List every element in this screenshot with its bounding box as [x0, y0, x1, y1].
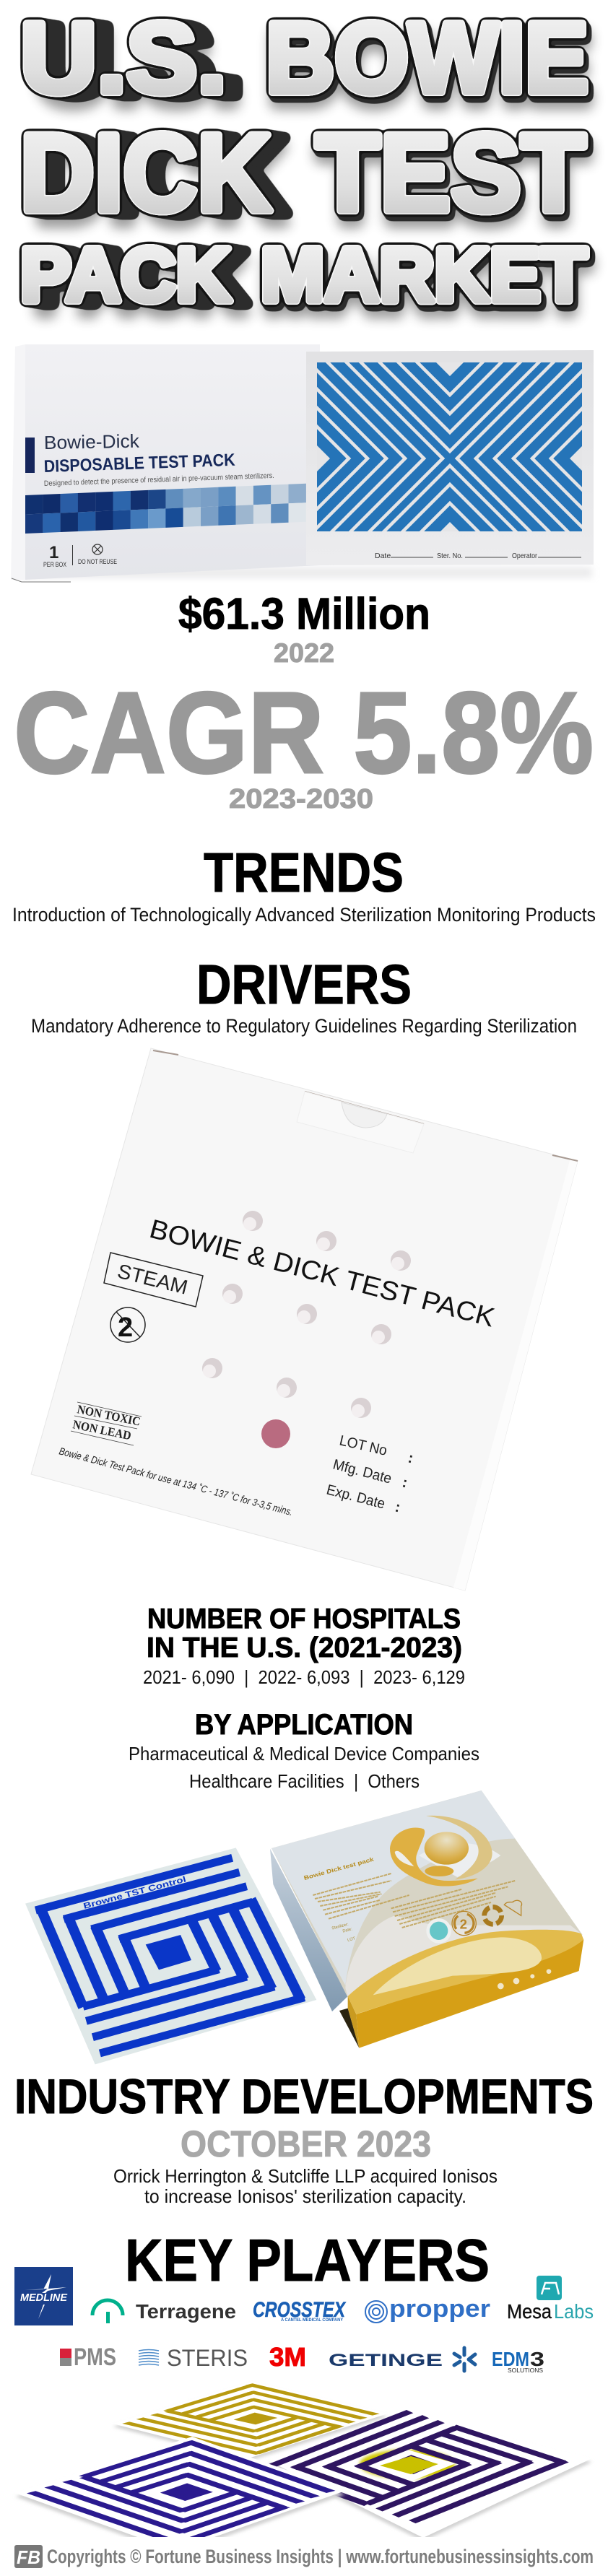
title line: PACK MARKET: MARKET	[261, 232, 587, 318]
title line: DICK TEST: DICK	[20, 111, 272, 235]
non toxic label	[71, 1402, 142, 1445]
product photo: disposable test pack	[11, 344, 594, 582]
lot fields: Exp. Date	[325, 1482, 387, 1513]
development text	[113, 2165, 498, 2207]
logo: Terragene: Terragene	[136, 2300, 236, 2323]
gold sheet	[114, 2383, 386, 2460]
lot fields: :	[394, 1500, 402, 1515]
sterilizer fields	[331, 1923, 356, 1943]
development text: to increase Ionisos' sterilization capacity.	[144, 2185, 466, 2207]
lot fields: :	[407, 1450, 415, 1466]
box side	[11, 344, 25, 580]
logo: Getinge: GETINGE	[329, 2351, 443, 2370]
market value year: 2022	[274, 638, 334, 668]
hospital numbers: 2021- 6,090 | 2022- 6,093 | 2023- 6,129	[143, 1666, 465, 1688]
title line: PACK MARKET: PACK	[20, 232, 231, 318]
gold wrap front	[356, 1940, 583, 2048]
swirl logo	[390, 1816, 492, 1887]
logo: Medline: MEDLINE	[20, 2292, 68, 2304]
product photo: gold wrapped pack	[270, 1790, 583, 2048]
gold wrap curve	[348, 1930, 583, 2014]
non toxic label: NON TOXIC	[76, 1402, 142, 1429]
product photo: blue test sheet: Browne TST Control	[82, 1875, 187, 1911]
market value: $61.3 Million	[178, 589, 430, 638]
indicator dot	[261, 1419, 290, 1448]
development date: OCTOBER 2023	[181, 2123, 431, 2164]
checker band	[25, 484, 306, 534]
blue sheet	[16, 2437, 347, 2537]
steam box: STEAM	[116, 1260, 190, 1299]
single-use icon	[110, 1307, 145, 1343]
title line: PACK MARKET	[20, 232, 587, 318]
heading: trends: TRENDS	[204, 842, 404, 904]
heading: by application: BY APPLICATION	[195, 1709, 413, 1741]
logo: Getinge	[329, 2348, 475, 2371]
product photo: disposable test pack: PER BOX	[43, 561, 66, 568]
logo: Mesa Labs: Labs	[554, 2300, 594, 2323]
pack title: BOWIE & DICK TEST PACK	[147, 1214, 498, 1333]
title line: U.S. BOWIE	[20, 2, 589, 114]
do-not-reuse icon	[92, 544, 103, 554]
title line: DICK TEST	[20, 111, 586, 235]
blue chevron pattern	[317, 362, 582, 531]
logo: Crosstex: CROSSTEX	[253, 2298, 347, 2322]
CAGR period: 2023-2030	[229, 784, 373, 814]
heading: drivers: DRIVERS	[196, 954, 412, 1016]
heading: number of hospitals: IN THE U.S. (2021-2023)	[147, 1632, 462, 1663]
pack label: Bowie Dick test pack	[303, 1856, 375, 1881]
flap slits	[153, 1050, 578, 1161]
logo: Steris: STERIS	[167, 2345, 248, 2371]
application list	[129, 1743, 479, 1792]
flap tab	[297, 1092, 424, 1153]
heading: key players: KEY PLAYERS	[125, 2227, 490, 2294]
per box count: 1	[49, 543, 58, 562]
box front	[25, 344, 320, 580]
white icons on gold	[498, 1969, 551, 1989]
logo: Terragene	[92, 2300, 236, 2323]
box description: Designed to detect the presence of residual air in pre-vacuum steam sterilizers.	[44, 471, 274, 488]
product photo: steam test pack	[31, 1048, 578, 1591]
box subtitle: DISPOSABLE TEST PACK	[43, 451, 236, 477]
product photo: disposable test pack: DO NOT REUSE	[78, 558, 117, 565]
logo: Mesa Labs	[507, 2276, 594, 2323]
box title: Bowie-Dick	[44, 430, 140, 453]
logo: PMS	[60, 2344, 116, 2371]
insert form line: Date	[375, 552, 391, 560]
purple sheet	[269, 2410, 591, 2537]
logo: Crosstex: A CANTEL MEDICAL COMPANY	[281, 2318, 344, 2323]
footer	[14, 2545, 594, 2568]
logo: Propper: propper	[389, 2295, 490, 2323]
steam box	[104, 1253, 203, 1307]
pack top face	[272, 1790, 583, 1998]
box bottom edge	[12, 578, 71, 582]
product photo: blue test sheet	[25, 1848, 316, 2064]
sterilizer fields: Date:	[342, 1927, 353, 1934]
lot fields: :	[401, 1475, 409, 1491]
teal dot	[426, 1918, 451, 1944]
development text: Orrick Herrington & Sutcliffe LLP acquired Ionisos	[113, 2165, 498, 2187]
label fine print	[313, 1874, 515, 1928]
logo: EDM3: 3	[530, 2348, 544, 2370]
box divider	[72, 545, 73, 565]
title	[20, 2, 589, 318]
insert card	[306, 350, 594, 565]
logo: PMS: PMS	[74, 2344, 116, 2371]
non toxic label: NON LEAD	[71, 1417, 132, 1443]
insert form line: Operator	[512, 552, 537, 560]
application list: Healthcare Facilities | Others	[189, 1770, 420, 1792]
title line: U.S. BOWIE: BOWIE	[266, 2, 589, 114]
test holes	[202, 1211, 411, 1418]
insert form line: Ster. No.	[437, 552, 463, 560]
heading: number of hospitals: NUMBER OF HOSPITALS	[147, 1604, 461, 1635]
pack body	[31, 1048, 578, 1591]
logo: Mesa Labs: Mesa	[507, 2300, 552, 2323]
eco icons	[452, 1900, 522, 1936]
product photo: test sheets	[16, 2383, 591, 2537]
lot fields: Mfg. Date	[331, 1457, 394, 1487]
usage note: Bowie & Dick Test Pack for use at 134 ˚C - 137 ˚C for 3-3,5 mins.	[58, 1445, 294, 1518]
navy bar	[25, 438, 35, 473]
shadow under pack	[22, 567, 592, 578]
logo: 3M: 3M	[269, 2342, 306, 2372]
title line: U.S. BOWIE: U.S.	[20, 2, 227, 114]
footer logo: FB	[17, 2546, 40, 2568]
eco icons: 2	[460, 1917, 467, 1932]
pack right sheen	[453, 1158, 578, 1591]
sterilizer fields: Sterilizer:	[331, 1923, 349, 1931]
lot fields: LOT No	[338, 1432, 388, 1459]
pack left fold	[270, 1849, 348, 2011]
lot fields	[325, 1432, 415, 1515]
title line: DICK TEST: TEST	[316, 111, 586, 235]
application list: Pharmaceutical & Medical Device Companies	[129, 1743, 479, 1765]
logo: EDM3: EDM	[492, 2348, 529, 2370]
sterilizer fields: LOT	[347, 1936, 356, 1943]
insert form line	[375, 552, 581, 560]
logo: EDM3: SOLUTIONS	[508, 2367, 543, 2374]
single-use icon: 2	[118, 1313, 133, 1343]
heading: number of hospitals	[147, 1604, 462, 1663]
logo: Medline	[14, 2267, 73, 2325]
